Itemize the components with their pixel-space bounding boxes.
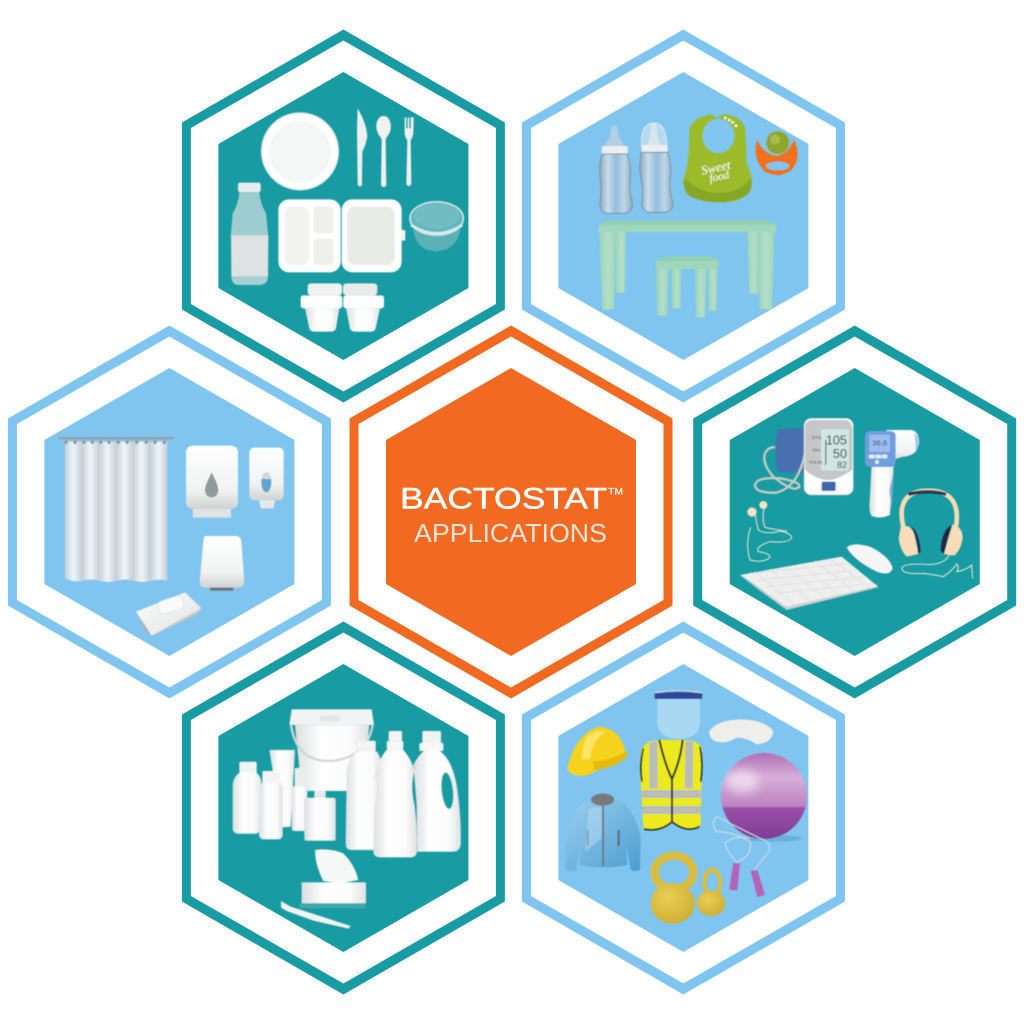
- icon: infrared thermometer: [865, 430, 919, 517]
- icon: capped baby bottle: [640, 123, 673, 212]
- icon: silicone bib: food: [708, 169, 731, 185]
- hexagon frame: safety and sports: [522, 622, 845, 994]
- hexagon frame: centre: [350, 326, 672, 698]
- icons: personal care: [233, 709, 461, 929]
- icon: detergent jug: [413, 731, 461, 852]
- icon: plate: [261, 112, 339, 190]
- icon: bucket: [289, 709, 374, 791]
- icon: blood pressure monitor: DIA: [813, 447, 821, 452]
- icon: teething toy: [756, 131, 798, 176]
- icon: skipping rope: [713, 817, 770, 897]
- icon: blood pressure monitor: PULSE: [809, 459, 823, 464]
- icon: cream tube: [269, 750, 295, 827]
- icon: lunch box: [278, 199, 405, 272]
- icons: baby products: [598, 114, 798, 317]
- icon: softener bottle: [373, 731, 417, 857]
- icon: high-vis vest: [640, 740, 702, 830]
- icon: knife: [357, 108, 367, 187]
- icon: headphones: [899, 491, 973, 578]
- icon: blood pressure monitor: [755, 418, 853, 495]
- icon: blood pressure monitor: 50: [833, 447, 847, 461]
- title: BACTOSTAT: BACTOSTAT: [400, 482, 607, 516]
- icon: sleep mask: [709, 719, 773, 744]
- trademark symbol: TM: [608, 486, 623, 496]
- icon: lotion bottle: [259, 771, 283, 839]
- icon: yogurt cups: [301, 283, 384, 332]
- icon: shower curtain: [58, 437, 174, 582]
- icon: towel dispenser: [186, 446, 238, 518]
- icon: silicone bib: Sweet: [700, 158, 732, 178]
- panel: centre title hexagon: [350, 326, 672, 698]
- icon: clear bowl: [410, 202, 463, 251]
- icons: food packaging: [231, 108, 463, 332]
- hexagon frame: electronics: [693, 326, 1016, 698]
- panel: medical and electronics: [693, 326, 1016, 698]
- icon: keyboard: [740, 557, 878, 610]
- hexagon frame: baby products: [522, 30, 845, 402]
- icon: spray bottle: [292, 767, 307, 831]
- icons: washroom: [58, 437, 284, 636]
- icon: baby bottle: [600, 126, 632, 213]
- panel: baby and childcare products: [522, 30, 845, 402]
- icon: rain jacket: [565, 794, 641, 871]
- icon: soap dispenser: [249, 448, 284, 508]
- icon: wet wipes pack: [136, 592, 202, 636]
- icon: fork: [405, 117, 414, 186]
- hexagon frame: washroom: [8, 326, 331, 698]
- icon: blood pressure monitor: 105: [826, 434, 847, 448]
- icon: toothbrush: [281, 901, 351, 929]
- icon: blood pressure monitor: 82: [837, 460, 847, 470]
- icon: blood pressure monitor: SYS: [812, 435, 821, 440]
- panel: safety and sports gear: [522, 622, 845, 994]
- icon: detergent bottle: [346, 741, 382, 850]
- icon: hand dryer: [200, 536, 244, 591]
- icon: milk bottle: [231, 183, 268, 285]
- panel: food packaging: [182, 30, 505, 402]
- panel: personal care packaging: [182, 622, 505, 994]
- hexagon frame: personal care: [182, 622, 505, 994]
- icon: earphones: [747, 501, 792, 561]
- icon: kettlebells: [651, 856, 725, 924]
- icon: flat bottle: [304, 791, 336, 841]
- icon: hard hat: [567, 727, 627, 776]
- icons: safety and sports: [565, 691, 807, 924]
- icon: silicone bib: [683, 114, 752, 202]
- icon: kids stool: [656, 256, 719, 317]
- icon: infrared thermometer: 36.6: [872, 439, 887, 448]
- icons: electronics: [740, 418, 973, 610]
- icon: kids table: [598, 220, 776, 310]
- hexagon frame: food packaging: [182, 30, 505, 402]
- icon: tissue box: [299, 849, 366, 908]
- panel: hygiene and washroom products: [8, 326, 331, 698]
- icon: face shield: [654, 691, 703, 739]
- icon: mouse: [847, 544, 893, 574]
- subtitle: APPLICATIONS: APPLICATIONS: [414, 520, 607, 548]
- icon: spoon: [376, 116, 391, 187]
- icon: small bottle: [233, 762, 262, 834]
- icon: exercise ball: [721, 753, 807, 842]
